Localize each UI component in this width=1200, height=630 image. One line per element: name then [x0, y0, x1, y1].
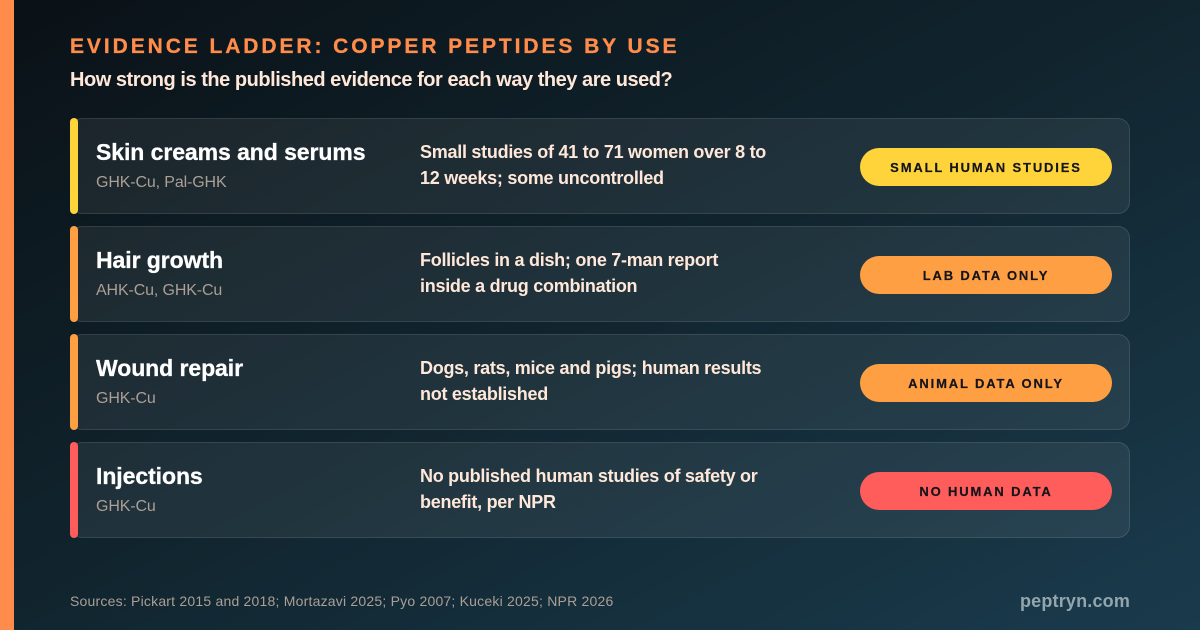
panel: wound repair: not established [420, 384, 548, 404]
panel: wound repair: Dogs, rats, mice and pigs; human results [420, 358, 761, 378]
panel: hair growth: AHK-Cu, GHK-Cu [96, 282, 222, 299]
title: EVIDENCE LADDER: COPPER PEPTIDES BY USE [70, 35, 679, 58]
panel: skin creams and serums: Small studies of 41 to 71 women over 8 to [420, 142, 766, 162]
panel: skin creams and serums: 12 weeks; some uncontrolled [420, 168, 664, 188]
panel: injections [70, 442, 1130, 538]
panel: skin creams and serums: Skin creams and serums [96, 139, 366, 165]
panel: injections: GHK-Cu [96, 498, 156, 515]
panel: wound repair [70, 334, 1130, 430]
panel: skin creams and serums [70, 118, 1130, 214]
panel: wound repair: GHK-Cu [96, 390, 156, 407]
panel: injections: No published human studies of safety or [420, 466, 758, 486]
panel: injections: Injections [96, 463, 203, 489]
panel: hair growth: inside a drug combination [420, 276, 637, 296]
panel: skin creams and serums: GHK-Cu, Pal-GHK [96, 174, 227, 191]
left accent stripe [0, 0, 14, 630]
panel: wound repair: ANIMAL DATA ONLY [908, 376, 1064, 391]
panel: hair growth: Hair growth [96, 247, 223, 273]
subtitle: How strong is the published evidence for each way they are used? [70, 69, 672, 91]
panel: injections: benefit, per NPR [420, 492, 556, 512]
panel: skin creams and serums: SMALL HUMAN STUDIES [890, 160, 1082, 175]
panel: hair growth: LAB DATA ONLY [923, 268, 1049, 283]
sources footer: Sources: Pickart 2015 and 2018; Mortazavi 2025; Pyo 2007; Kuceki 2025; NPR 2026 [70, 593, 613, 609]
panel: wound repair: Wound repair [96, 355, 243, 381]
brand url: peptryn.com [1020, 591, 1130, 611]
panel: hair growth [70, 226, 1130, 322]
panel: injections: NO HUMAN DATA [919, 484, 1053, 499]
panel: hair growth: Follicles in a dish; one 7-man report [420, 250, 718, 270]
